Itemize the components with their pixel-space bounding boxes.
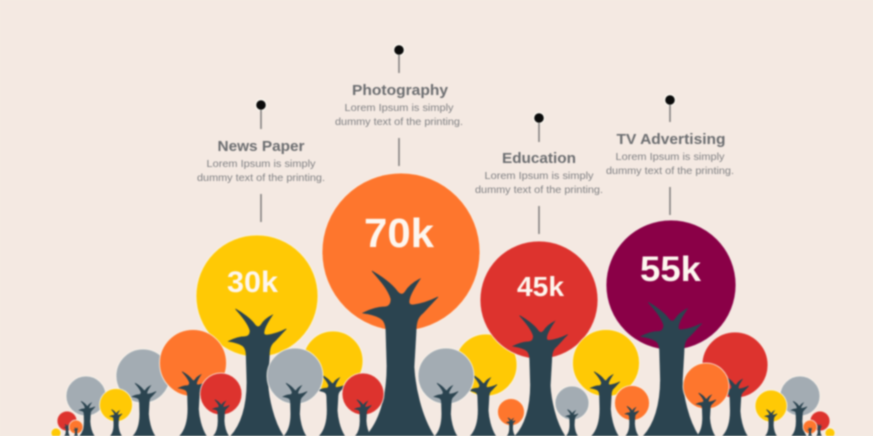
label: Photography [335,44,463,166]
tree: orange right [614,386,650,436]
tree: small yellow right of centre [455,334,517,436]
tree: Photography 70k [322,173,480,436]
value: 30k: 30k [227,266,278,299]
label: Education [475,112,603,234]
text block: TV Advertising [606,151,734,177]
heading: Photography: Photography [352,82,449,99]
value: 70k: 70k [364,210,434,256]
tree: grey left [116,349,170,436]
tree: tiny yellow right [825,428,835,436]
trunk: Education [513,316,568,436]
tree: red left [200,373,242,436]
tree: grey far right [780,376,820,436]
heading: TV Advertising: TV Advertising [616,131,726,148]
value: 45k: 45k [517,271,564,302]
trunk: TV Advertising [641,302,702,436]
tree: red centre left [342,373,384,436]
trunk: Photography [363,271,438,436]
tree: News Paper 30k [196,235,318,436]
text block: News Paper: Lorem Ipsum is simply [206,158,316,170]
text block: News Paper [197,158,325,184]
text block: TV Advertising: dummy text of the printing. [606,165,734,177]
tree: tiny orange right [803,420,817,436]
tree: grey centre right [555,386,589,436]
label: TV Advertising [606,94,734,215]
tree: tiny red right [810,411,830,436]
heading: Education: Education [502,150,576,167]
tree: yellow far right [755,390,787,436]
tree: Education 45k [480,241,598,436]
heading: News Paper: News Paper [218,138,305,155]
tree: grey centre [418,348,474,436]
text block: News Paper: dummy text of the printing. [197,172,325,184]
tree: red right [702,332,768,436]
text block: TV Advertising: Lorem Ipsum is simply [616,151,725,163]
tree: tiny red left [57,411,77,436]
tree: yellow right [572,330,640,436]
tree: TV Advertising 55k [606,220,736,436]
text block: Education: Lorem Ipsum is simply [484,170,594,182]
value: 55k: 55k [640,250,702,289]
tree: grey beside News Paper [267,348,323,436]
tree: small orange centre [498,398,524,436]
text block: Photography: Lorem Ipsum is simply [344,102,454,114]
text block: Education [475,170,603,196]
label: News Paper [197,100,325,222]
tree: yellow far left [100,388,132,436]
tree: small yellow left of centre [303,331,363,436]
tree: grey far left [66,376,106,436]
trunk: News Paper [229,309,286,436]
tree: tiny yellow left [51,428,61,436]
tree: tiny orange left [69,420,83,436]
text block: Photography: dummy text of the printing. [335,116,463,128]
text block: Photography [335,102,463,128]
text block: Education: dummy text of the printing. [475,184,603,196]
tree: orange left [160,330,226,436]
tree: orange far right [683,363,729,436]
